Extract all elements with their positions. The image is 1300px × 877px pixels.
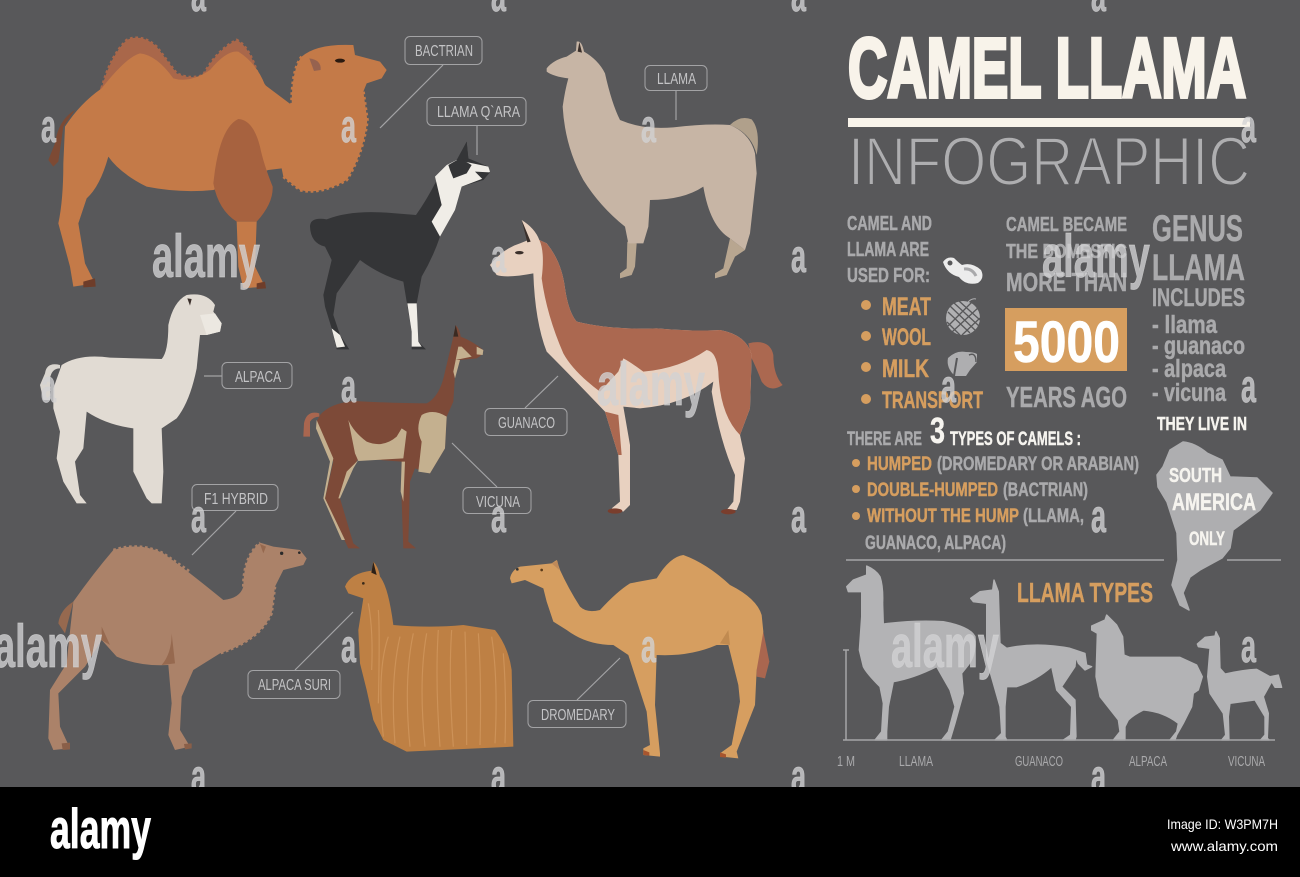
icon: milk jug xyxy=(948,352,977,376)
text block: types of camels: (LLAMA, xyxy=(1023,506,1084,527)
watermarks: a xyxy=(341,100,356,152)
text block: uses: USED FOR: xyxy=(847,265,930,287)
text block: types of camels: TYPES OF CAMELS : xyxy=(950,429,1081,450)
text block: types of camels: GUANACO, ALPACA) xyxy=(865,533,1006,554)
title xyxy=(848,21,1250,200)
text block: uses: MEAT xyxy=(882,293,931,321)
chart axis and labels: VICUNA xyxy=(1228,753,1265,770)
label: alpaca suri xyxy=(248,612,353,698)
text block: domestication: THE DOMESTIC xyxy=(1006,241,1127,263)
watermarks: a xyxy=(491,490,506,542)
footer: alamy logo: alamy xyxy=(50,797,151,860)
label: guanaco xyxy=(485,376,567,436)
silhouette: guanaco xyxy=(971,580,1092,740)
watermarks: a xyxy=(641,100,656,152)
watermarks: a xyxy=(1241,360,1256,412)
text block: types of camels: (DROMEDARY OR ARABIAN) xyxy=(937,454,1139,475)
chart axis and labels: GUANACO xyxy=(1015,753,1063,770)
text block: uses: LLAMA ARE xyxy=(847,239,929,261)
animal: f1 hybrid camel xyxy=(48,543,307,750)
animal: bactrian camel xyxy=(48,38,387,289)
text block: uses: TRANSPORT xyxy=(882,387,983,414)
label: bactrian: BACTRIAN xyxy=(415,43,473,60)
watermarks: a xyxy=(41,360,56,412)
watermarks: a xyxy=(641,620,656,672)
text block: genus llama: - llama xyxy=(1152,311,1218,339)
footer: image id and url: Image ID: W3PM7H xyxy=(1167,816,1278,832)
label: vicuna: VICUNA xyxy=(476,494,520,511)
chart axis and labels: ALPACA xyxy=(1129,753,1167,770)
map: south america: ONLY xyxy=(1189,529,1225,550)
label: guanaco: GUANACO xyxy=(498,415,555,432)
watermarks: a xyxy=(191,490,206,542)
icon: meat xyxy=(943,258,982,284)
label: alpaca suri: ALPACA SURI xyxy=(258,677,331,694)
labels: animal name callouts xyxy=(192,36,707,728)
map: south america: AMERICA xyxy=(1172,489,1256,516)
text block: uses: CAMEL AND xyxy=(847,213,932,235)
text block: types of camels: HUMPED xyxy=(867,454,932,475)
chart axis and labels: 1 M xyxy=(837,753,855,770)
watermarks: a xyxy=(41,100,56,152)
text block: types of camels: THERE ARE xyxy=(847,429,922,450)
animal: guanaco xyxy=(490,220,783,514)
label: llama xyxy=(645,66,707,120)
silhouette: alpaca xyxy=(1092,615,1202,740)
footer: image id and url xyxy=(1167,816,1278,854)
watermarks: a xyxy=(341,620,356,672)
chart axis and labels: LLAMA xyxy=(899,753,933,770)
watermarks: a xyxy=(1241,100,1256,152)
map: south america: SOUTH xyxy=(1169,465,1222,487)
watermarks: a xyxy=(941,360,956,412)
label: bactrian xyxy=(380,36,482,128)
text block: genus llama: INCLUDES xyxy=(1152,284,1245,312)
label: llama: LLAMA xyxy=(657,71,696,88)
silhouette: llama xyxy=(847,566,975,740)
watermarks: alamy xyxy=(152,223,260,290)
text block: domestication: 5000 xyxy=(1013,310,1120,375)
text block: domestication: CAMEL BECAME xyxy=(1006,214,1127,236)
text block: genus llama: GENUS xyxy=(1152,208,1243,249)
watermarks: a xyxy=(341,360,356,412)
label: f1 hybrid xyxy=(192,484,278,555)
watermarks: alamy xyxy=(1042,223,1150,290)
animal: llama xyxy=(547,41,758,278)
heading: llama types: LLAMA TYPES xyxy=(1017,577,1153,608)
chart: llama type silhouettes xyxy=(847,566,1282,740)
chart axis and labels xyxy=(837,650,1275,770)
text block: types of camels xyxy=(847,410,1139,554)
watermarks: a xyxy=(1091,490,1106,542)
text block: uses: MILK xyxy=(882,355,929,383)
text block: types of camels: (BACTRIAN) xyxy=(1003,480,1088,501)
text block: genus llama: - guanaco xyxy=(1152,332,1245,360)
footer: image id and url: www.alamy.com xyxy=(1170,838,1278,854)
text block: uses xyxy=(847,213,983,414)
text block: genus llama xyxy=(1152,208,1247,434)
text block: types of camels: 3 xyxy=(930,410,945,451)
watermarks: a xyxy=(1091,750,1106,802)
watermarks: a xyxy=(791,230,806,282)
watermarks: alamy xyxy=(891,613,999,680)
animal: vicuna xyxy=(303,325,483,548)
label: dromedary: DROMEDARY xyxy=(541,707,615,724)
label: vicuna xyxy=(452,443,531,514)
label: llama qara xyxy=(427,98,526,155)
label: alpaca: ALPACA xyxy=(235,369,281,386)
text block: domestication: MORE THAN xyxy=(1006,267,1127,297)
text block: genus llama: LLAMA xyxy=(1152,247,1245,288)
watermarks: a xyxy=(791,490,806,542)
watermarks: a xyxy=(491,750,506,802)
text block: types of camels: WITHOUT THE HUMP xyxy=(867,506,1019,527)
watermarks: alamy xyxy=(597,351,705,418)
watermarks: a xyxy=(1241,620,1256,672)
label: llama qara: LLAMA Q`ARA xyxy=(437,104,520,121)
text block: genus llama: THEY LIVE IN xyxy=(1157,414,1247,434)
silhouette: vicuna xyxy=(1197,632,1282,740)
text block: genus llama: - vicuna xyxy=(1152,379,1227,407)
watermarks: a xyxy=(191,750,206,802)
watermarks: a xyxy=(791,750,806,802)
text block: genus llama: - alpaca xyxy=(1152,355,1227,383)
map: south america xyxy=(1157,442,1272,610)
text block: uses: WOOL xyxy=(882,324,931,351)
animal: dromedary camel xyxy=(510,555,769,758)
label: f1 hybrid: F1 HYBRID xyxy=(204,491,268,508)
watermarks: a xyxy=(491,230,506,282)
label: dromedary xyxy=(528,658,626,728)
animal: alpaca xyxy=(40,294,222,503)
animal: llama qara xyxy=(310,142,490,349)
text block: domestication: YEARS AGO xyxy=(1006,382,1127,414)
animal: alpaca suri xyxy=(345,562,513,752)
text block: types of camels: DOUBLE-HUMPED xyxy=(867,480,998,501)
icon: wool ball xyxy=(946,299,980,335)
label: alpaca xyxy=(204,362,292,388)
text block: domestication xyxy=(1005,214,1127,414)
